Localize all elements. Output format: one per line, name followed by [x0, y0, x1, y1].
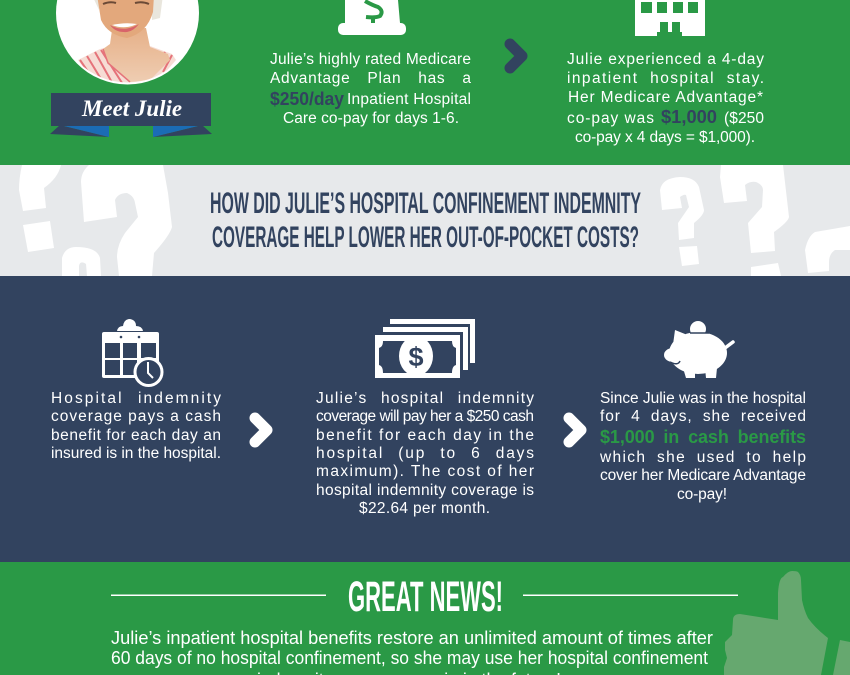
text: benefits restore: 60 days of no hospital confinement, so she may use her hospital confinement [111, 648, 708, 668]
text: Julie's benefit: Julie’s hospital indemnity [316, 390, 534, 407]
icon: stack of cash: $ [408, 342, 424, 372]
text: benefits restore [111, 628, 713, 675]
text: what coverage pays [51, 390, 221, 462]
text: cash benefits received [599, 390, 806, 503]
icon: calendar with clock [102, 319, 162, 386]
text: inpatient stay: ($250 [724, 110, 764, 127]
text: cash benefits received: which she used to help [599, 449, 806, 466]
icon: stack of cash [375, 319, 475, 378]
text: Julie's benefit: $22.64 per month. [359, 500, 490, 517]
arrow: white chevron 2 [569, 418, 581, 442]
panel: Julie's Medicare costs [50, 0, 764, 146]
text: what coverage pays: benefit for each day an [51, 427, 221, 444]
text: inpatient stay: inpatient hospital stay. [567, 70, 764, 87]
heading: GREAT NEWS: GREAT NEWS! [348, 573, 503, 621]
panel: how coverage helped [0, 276, 850, 562]
banner: Meet Julie [50, 93, 212, 137]
text: Julie's benefit: coverage will pay her a $250 cash [316, 408, 534, 425]
icon: thumbs up [724, 571, 850, 675]
heading: question [210, 187, 641, 254]
text: Medicare Advantage plan: Care co-pay for days 1-6. [283, 110, 459, 127]
banner: Meet Julie: Meet Julie [81, 96, 182, 121]
text: inpatient stay: co-pay x 4 days = $1,000). [575, 129, 755, 146]
icon: question marks background [19, 165, 850, 276]
panel: great news [0, 562, 850, 675]
text: cash benefits received: for 4 days, she received [600, 408, 806, 425]
text: what coverage pays: Hospital indemnity [51, 390, 221, 407]
text: cash benefits received: cover her Medicare Advantage [600, 467, 806, 484]
text: cash benefits received: co-pay! [677, 486, 727, 503]
panel: question banner [0, 165, 850, 276]
text: benefits restore: Julie’s inpatient hospital benefits restore an unlimited amount of times after [111, 628, 713, 648]
text: cash benefits received: Since Julie was in the hospital [600, 390, 806, 407]
text: inpatient stay: Her Medicare Advantage* [568, 89, 763, 106]
arrow: white chevron 1 [255, 418, 267, 442]
text: Medicare Advantage plan: Inpatient Hospital [347, 91, 471, 108]
icon: money bag [338, 0, 406, 35]
text: inpatient stay: $1,000 [661, 107, 717, 127]
text: Julie's benefit [316, 390, 534, 517]
text: Medicare Advantage plan: $250/day [270, 89, 344, 109]
text: what coverage pays: coverage pays a cash [51, 408, 221, 425]
text: cash benefits received: $1,000 in cash benefits [600, 427, 806, 447]
text: Julie's benefit: benefit for each day in the [316, 427, 534, 444]
text: Medicare Advantage plan: Julie’s highly rated Medicare [270, 51, 471, 68]
icon: hospital [635, 0, 705, 36]
text: inpatient stay [567, 51, 764, 146]
text: what coverage pays: insured is in the hospital. [51, 445, 221, 462]
text: Julie's benefit: hospital (up to 6 days [316, 445, 534, 462]
icon: piggy bank [664, 321, 733, 378]
text: inpatient stay: Julie experienced a 4-day [567, 51, 764, 68]
text: Julie's benefit: hospital indemnity coverage is [316, 482, 534, 499]
text: Julie's benefit: maximum). The cost of her [316, 463, 534, 480]
photo: Julie portrait [56, 0, 199, 90]
text: Medicare Advantage plan: Advantage Plan has a [270, 70, 471, 87]
arrow: navy chevron [510, 44, 522, 68]
text: Medicare Advantage plan [270, 51, 471, 127]
text: inpatient stay: co-pay was [567, 110, 654, 127]
